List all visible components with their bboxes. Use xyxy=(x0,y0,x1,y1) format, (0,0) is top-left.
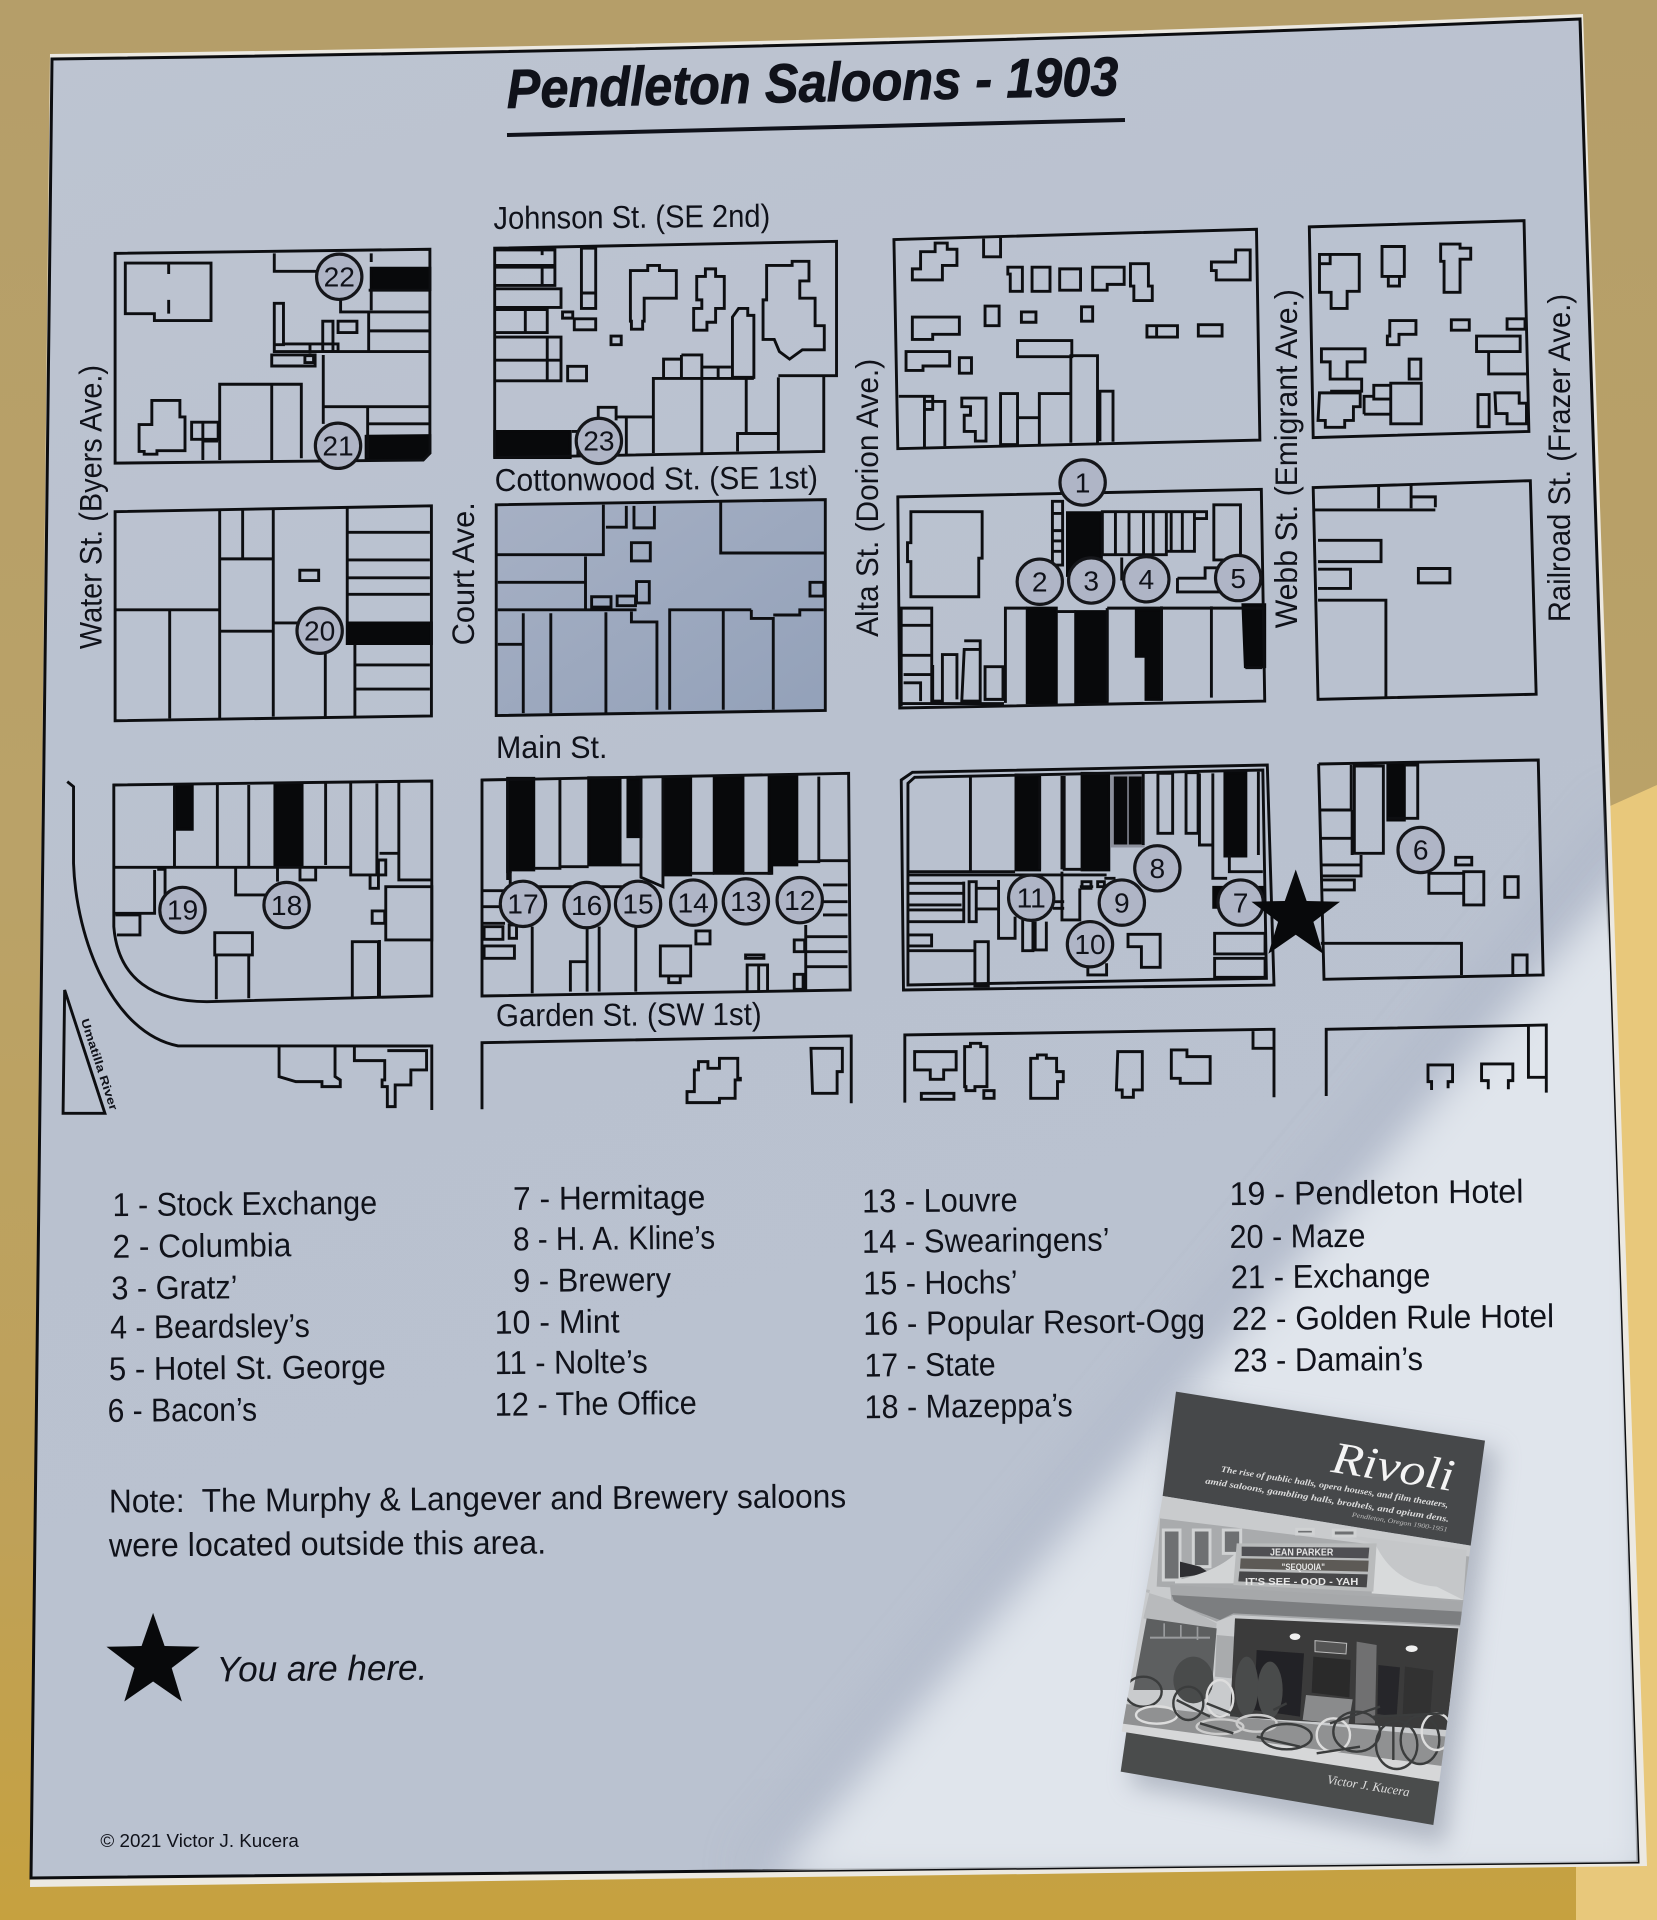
block: Alta and Johnson xyxy=(894,229,1260,449)
legend column 2 xyxy=(495,1179,715,1424)
book subtitle: Pendleton, Oregon 1900-1951 xyxy=(1350,1512,1448,1534)
numbered saloon markers: 8 xyxy=(1150,853,1165,884)
legend column 4: 23 - Damain’s xyxy=(1233,1341,1423,1380)
block: Webb and Cottonwood xyxy=(1313,481,1536,699)
block: Alta and Cottonwood xyxy=(898,489,1265,708)
bicycles xyxy=(1125,1677,1452,1769)
marquee text xyxy=(1245,1548,1358,1588)
river triangle xyxy=(63,990,105,1113)
numbered saloon markers: 4 xyxy=(1138,564,1154,595)
block: Water and Johnson xyxy=(115,249,430,463)
legend column 3: 13 - Louvre xyxy=(862,1182,1018,1220)
note xyxy=(108,1478,846,1565)
legend column 1: 5 - Hotel St. George xyxy=(109,1349,386,1388)
block: Water and Main xyxy=(114,781,432,1002)
block: Webb and Johnson xyxy=(1309,221,1529,438)
map: lower-right blocks xyxy=(901,760,1546,1103)
map: lower-left blocks xyxy=(63,773,851,1113)
street labels: Main St. xyxy=(496,729,607,765)
numbered saloon markers: 2 xyxy=(1032,567,1048,598)
block: Court and Main xyxy=(482,773,850,996)
street labels: Water St. (Byers Ave.) xyxy=(73,365,109,649)
legend column 2: 12 - The Office xyxy=(495,1385,697,1424)
legend column 1: 2 - Columbia xyxy=(112,1227,292,1266)
legend column 3: 16 - Popular Resort-Ogg xyxy=(863,1303,1205,1343)
storefront xyxy=(1230,1618,1458,1730)
marquee text: IT'S SEE - OOD - YAH xyxy=(1245,1577,1358,1588)
legend column 2: 11 - Nolte’s xyxy=(495,1344,648,1382)
numbered saloon markers: 10 xyxy=(1074,929,1106,960)
numbered saloon markers: 13 xyxy=(730,886,762,917)
block: Court and Cottonwood (shaded) xyxy=(496,500,825,716)
top cover band xyxy=(1163,1392,1485,1546)
book subtitle: amid saloons, gambling halls, brothels, and opium dens. xyxy=(1205,1475,1450,1524)
you are here key xyxy=(106,1613,427,1702)
river label: Umatilla River xyxy=(78,1017,120,1112)
street labels: Railroad St. (Frazer Ave.) xyxy=(1541,294,1577,622)
book subtitle: The rise of public halls, opera houses, and film theaters, xyxy=(1220,1464,1449,1510)
numbered saloon markers: 23 xyxy=(583,426,615,457)
legend column 4: 22 - Golden Rule Hotel xyxy=(1232,1298,1554,1338)
numbered saloon markers xyxy=(160,254,1443,967)
legend column 3 xyxy=(862,1182,1205,1426)
book subtitle xyxy=(1205,1464,1450,1534)
river road and lower left buildings xyxy=(67,782,432,1110)
crowd xyxy=(1173,1657,1283,1718)
numbered saloon markers: 21 xyxy=(322,431,354,462)
marquee board xyxy=(1233,1543,1377,1592)
legend column 2: 8 - H. A. Kline’s xyxy=(513,1220,715,1258)
street labels: Court Ave. xyxy=(445,502,481,645)
ground xyxy=(1123,1704,1446,1766)
numbered saloon markers: 22 xyxy=(324,262,355,293)
street labels: Alta St. (Dorion Ave.) xyxy=(849,359,885,637)
upper facade xyxy=(1157,1518,1470,1603)
block: south of Garden, Alta xyxy=(905,1029,1274,1103)
block: Water and Cottonwood xyxy=(115,506,431,721)
legend column 2: 10 - Mint xyxy=(495,1304,620,1342)
numbered saloon markers: 3 xyxy=(1083,565,1099,596)
numbered saloon markers: 5 xyxy=(1230,563,1246,594)
note: Note: The Murphy & Langever and Brewery saloons xyxy=(109,1478,846,1521)
copyright: © 2021 Victor J. Kucera xyxy=(100,1830,300,1851)
numbered saloon markers: 7 xyxy=(1233,887,1248,918)
map: upper-right blocks xyxy=(894,221,1536,708)
legend column 4: 20 - Maze xyxy=(1229,1218,1366,1256)
legend xyxy=(108,1174,1554,1430)
legend column 3: 18 - Mazeppa’s xyxy=(864,1387,1073,1426)
book author: Victor J. Kucera xyxy=(1326,1772,1411,1799)
numbered saloon markers: 6 xyxy=(1413,835,1428,866)
block: Alta and Main xyxy=(901,765,1274,990)
cover photograph xyxy=(1122,1496,1470,1782)
numbered saloon markers: 15 xyxy=(622,889,654,920)
numbered saloon markers: 19 xyxy=(167,895,198,926)
numbered saloon markers: 18 xyxy=(271,890,302,921)
book shadow xyxy=(1130,1400,1498,1845)
numbered saloon markers: 14 xyxy=(678,887,709,918)
street labels: Cottonwood St. (SE 1st) xyxy=(495,459,818,498)
legend column 1 xyxy=(108,1185,386,1430)
numbered saloon markers: 17 xyxy=(507,889,539,920)
block: Court and Johnson xyxy=(495,241,837,458)
street labels: Webb St. (Emigrant Ave.) xyxy=(1268,289,1304,628)
numbered saloon markers: 9 xyxy=(1114,887,1130,918)
legend column 1: 4 - Beardsley’s xyxy=(110,1308,310,1347)
numbered saloon markers: 1 xyxy=(1075,467,1090,498)
book cover: Rivoli xyxy=(1100,1392,1500,1825)
street labels: Garden St. (SW 1st) xyxy=(496,996,762,1033)
marquee text: JEAN PARKER xyxy=(1270,1548,1333,1559)
street labels: Johnson St. (SE 2nd) xyxy=(493,198,770,236)
canopy xyxy=(1170,1585,1463,1627)
block: Webb and Main xyxy=(1319,760,1543,979)
title: Pendleton Saloons - 1903 xyxy=(506,45,1119,120)
legend column 1: 6 - Bacon’s xyxy=(108,1392,257,1430)
legend column 1: 1 - Stock Exchange xyxy=(112,1185,377,1224)
legend column 1: 3 - Gratz’ xyxy=(111,1269,238,1307)
icon: map star, you are here xyxy=(1251,870,1340,954)
block: south of Garden, Court xyxy=(482,1036,851,1109)
legend column 4: 19 - Pendleton Hotel xyxy=(1229,1174,1524,1213)
numbered saloon markers: 16 xyxy=(571,890,602,921)
legend column 3: 15 - Hochs’ xyxy=(863,1264,1018,1303)
book title: Rivoli xyxy=(1327,1432,1458,1501)
legend column 3: 17 - State xyxy=(864,1346,996,1385)
map: upper-left blocks xyxy=(115,241,837,721)
legend column 2: 9 - Brewery xyxy=(513,1262,672,1300)
block: south of Garden, Webb xyxy=(1326,1025,1546,1096)
bottom cover band xyxy=(1121,1730,1439,1825)
left shop xyxy=(1144,1590,1216,1628)
numbered saloon markers: 12 xyxy=(784,885,815,916)
street labels xyxy=(73,198,1577,1033)
wall sunlight patch xyxy=(1576,785,1657,1920)
legend column 4 xyxy=(1229,1174,1554,1380)
marquee text: "SEQUOIA" xyxy=(1282,1562,1325,1572)
note: were located outside this area. xyxy=(108,1525,546,1565)
numbered saloon markers: 11 xyxy=(1017,883,1046,914)
legend column 2: 7 - Hermitage xyxy=(513,1179,705,1218)
legend column 3: 14 - Swearingens’ xyxy=(862,1222,1110,1261)
legend column 4: 21 - Exchange xyxy=(1231,1258,1431,1296)
numbered saloon markers: 20 xyxy=(304,616,335,647)
you are here key: You are here. xyxy=(216,1648,427,1690)
